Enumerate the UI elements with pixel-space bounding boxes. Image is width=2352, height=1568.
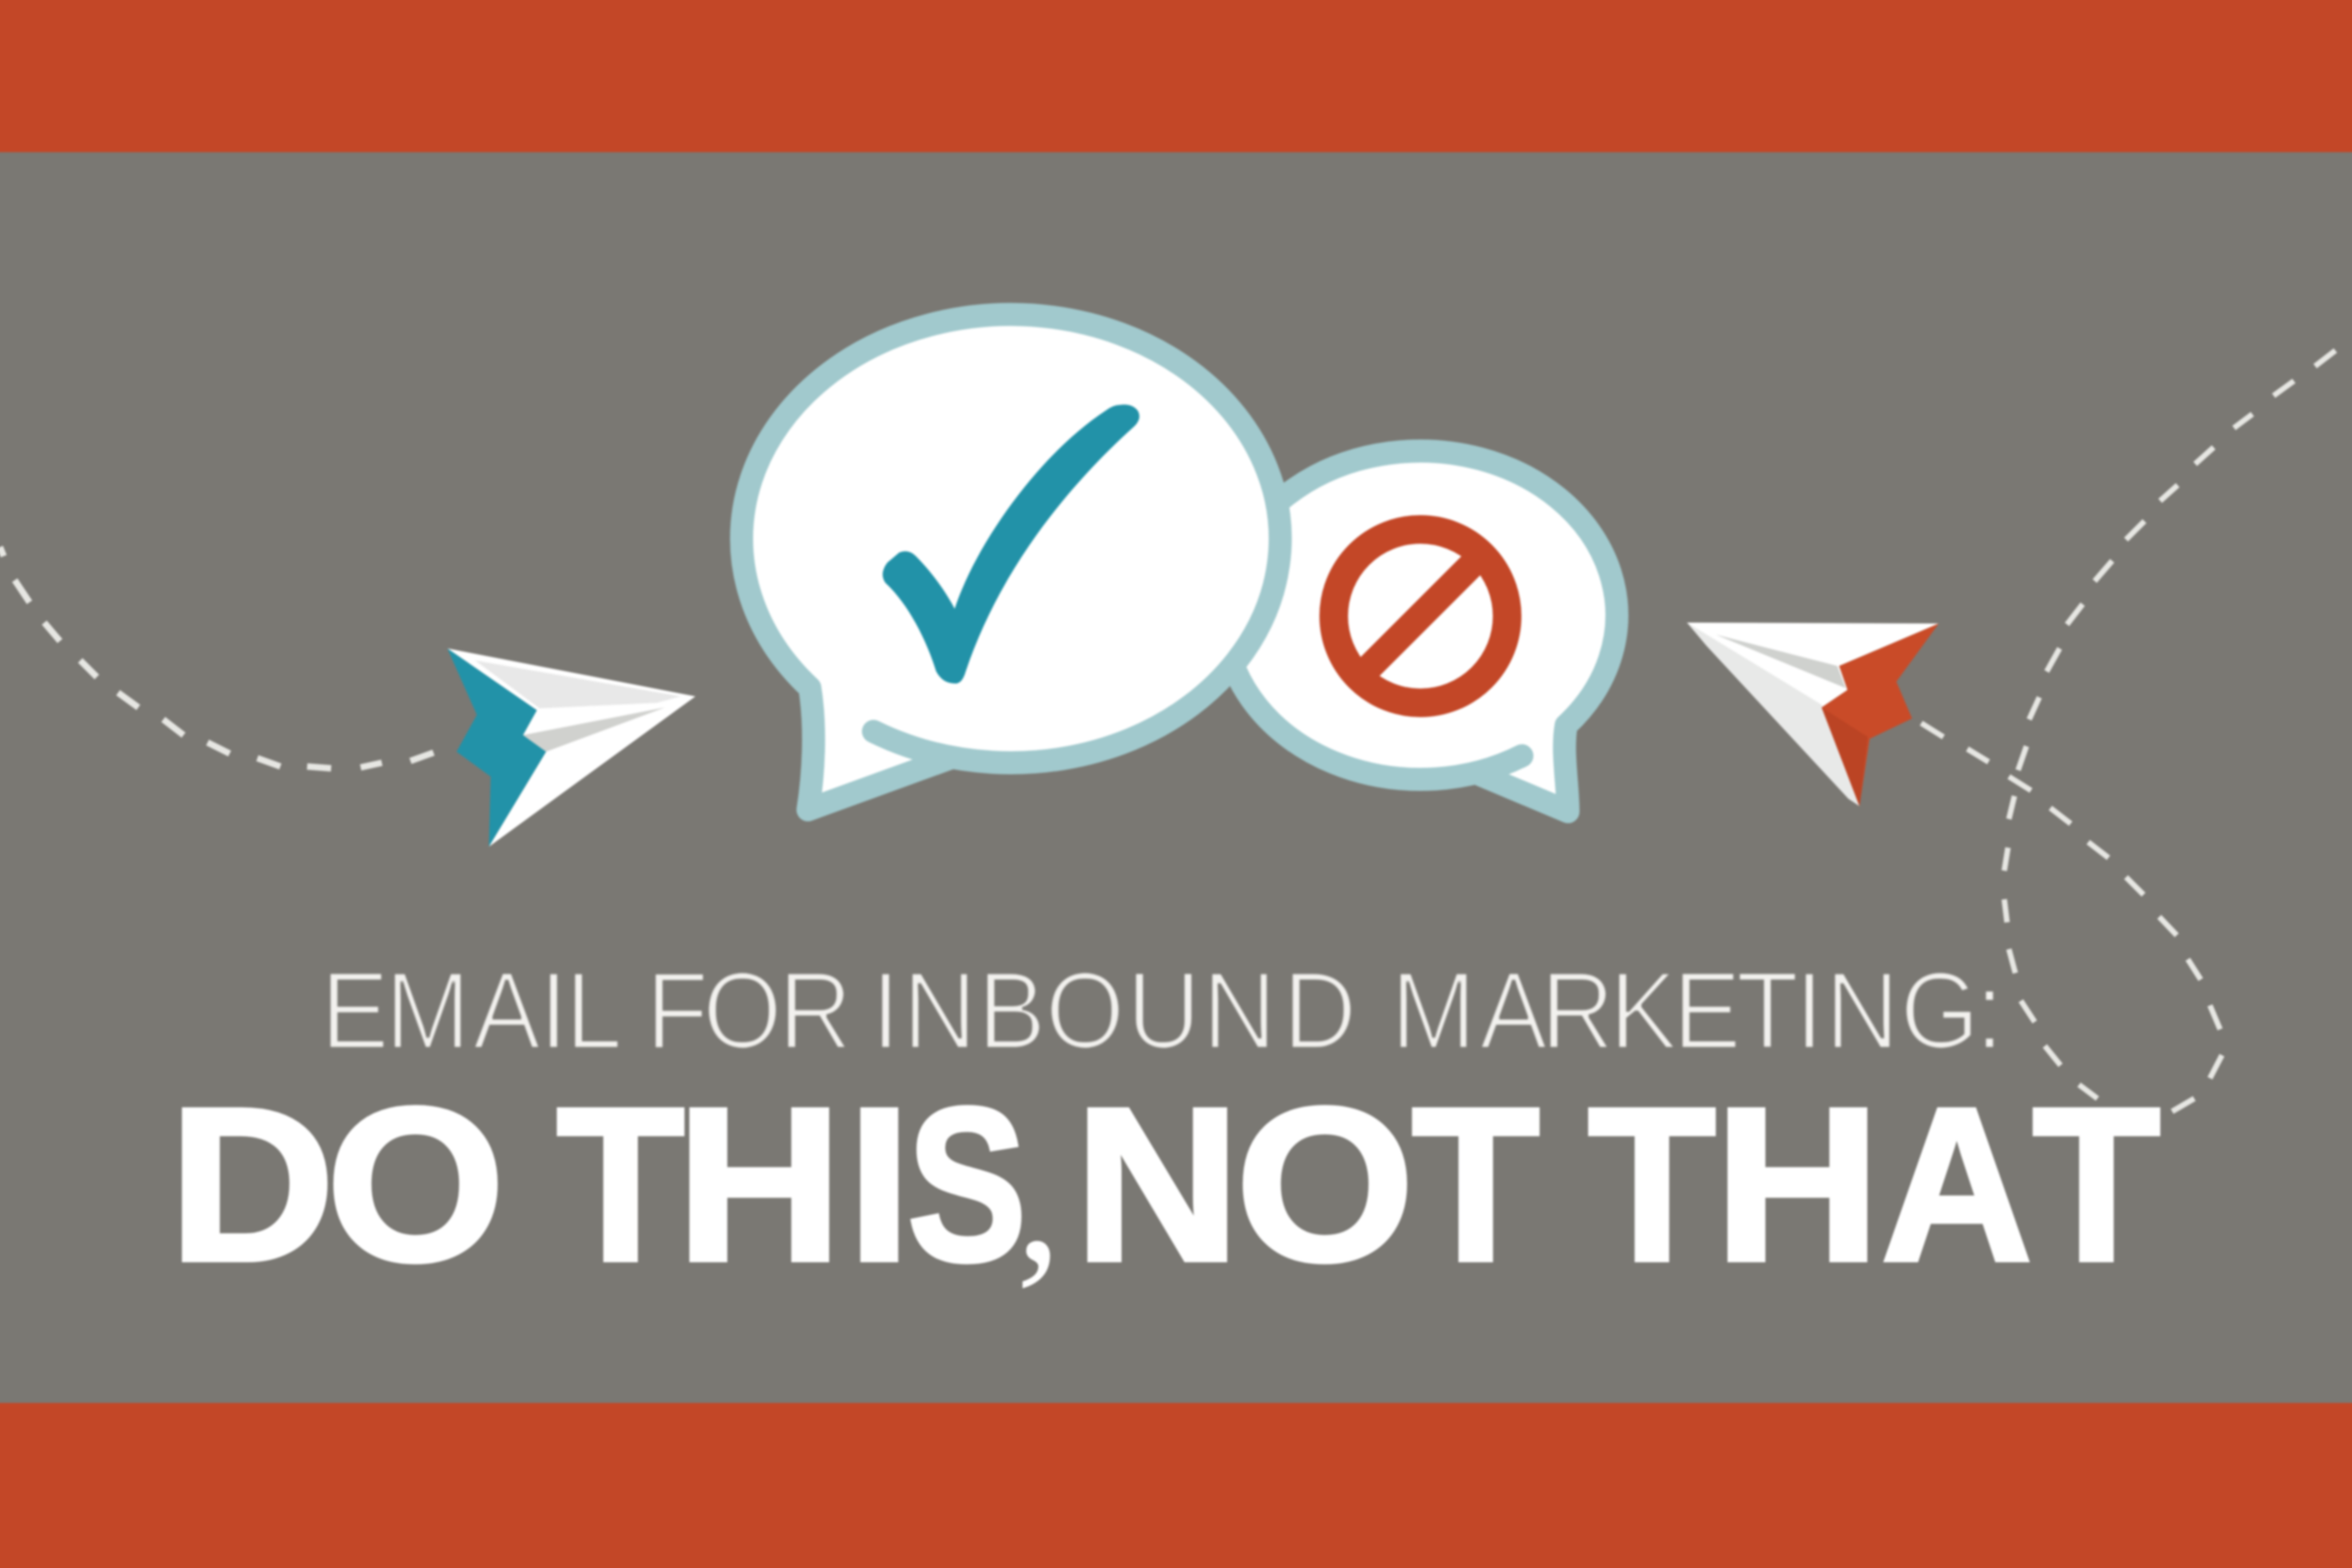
icon: red paper plane <box>1687 623 1939 806</box>
icon: large speech bubble with check mark <box>742 315 1280 810</box>
subtitle line: MARKETING: <box>1391 950 2003 1072</box>
main headline: THIS <box>557 1063 1027 1307</box>
main headline <box>169 1063 2160 1307</box>
subtitle line: EMAIL <box>321 950 623 1072</box>
subtitle line <box>321 950 2003 1072</box>
title <box>169 950 2160 1307</box>
comma: , <box>1016 1097 1062 1301</box>
dashed flight path: left <box>0 547 434 768</box>
large bubble outline <box>742 315 1280 810</box>
bottom red band <box>0 1403 2352 1568</box>
small bubble fill <box>1480 725 1568 808</box>
subtitle line: INBOUND <box>872 950 1357 1072</box>
prohibition sign <box>1334 529 1507 703</box>
icon: teal paper plane <box>447 648 695 847</box>
large bubble fill <box>806 688 950 808</box>
main headline: DO <box>169 1063 505 1307</box>
main headline: THAT <box>1588 1063 2160 1307</box>
small bubble outline <box>1224 451 1617 812</box>
icon: small speech bubble with prohibition sign <box>1224 451 1617 812</box>
check mark <box>883 405 1139 683</box>
main headline: NOT <box>1075 1063 1539 1307</box>
top red band <box>0 0 2352 152</box>
dashed flight path: right <box>1921 350 2335 1111</box>
subtitle line: FOR <box>646 950 852 1072</box>
